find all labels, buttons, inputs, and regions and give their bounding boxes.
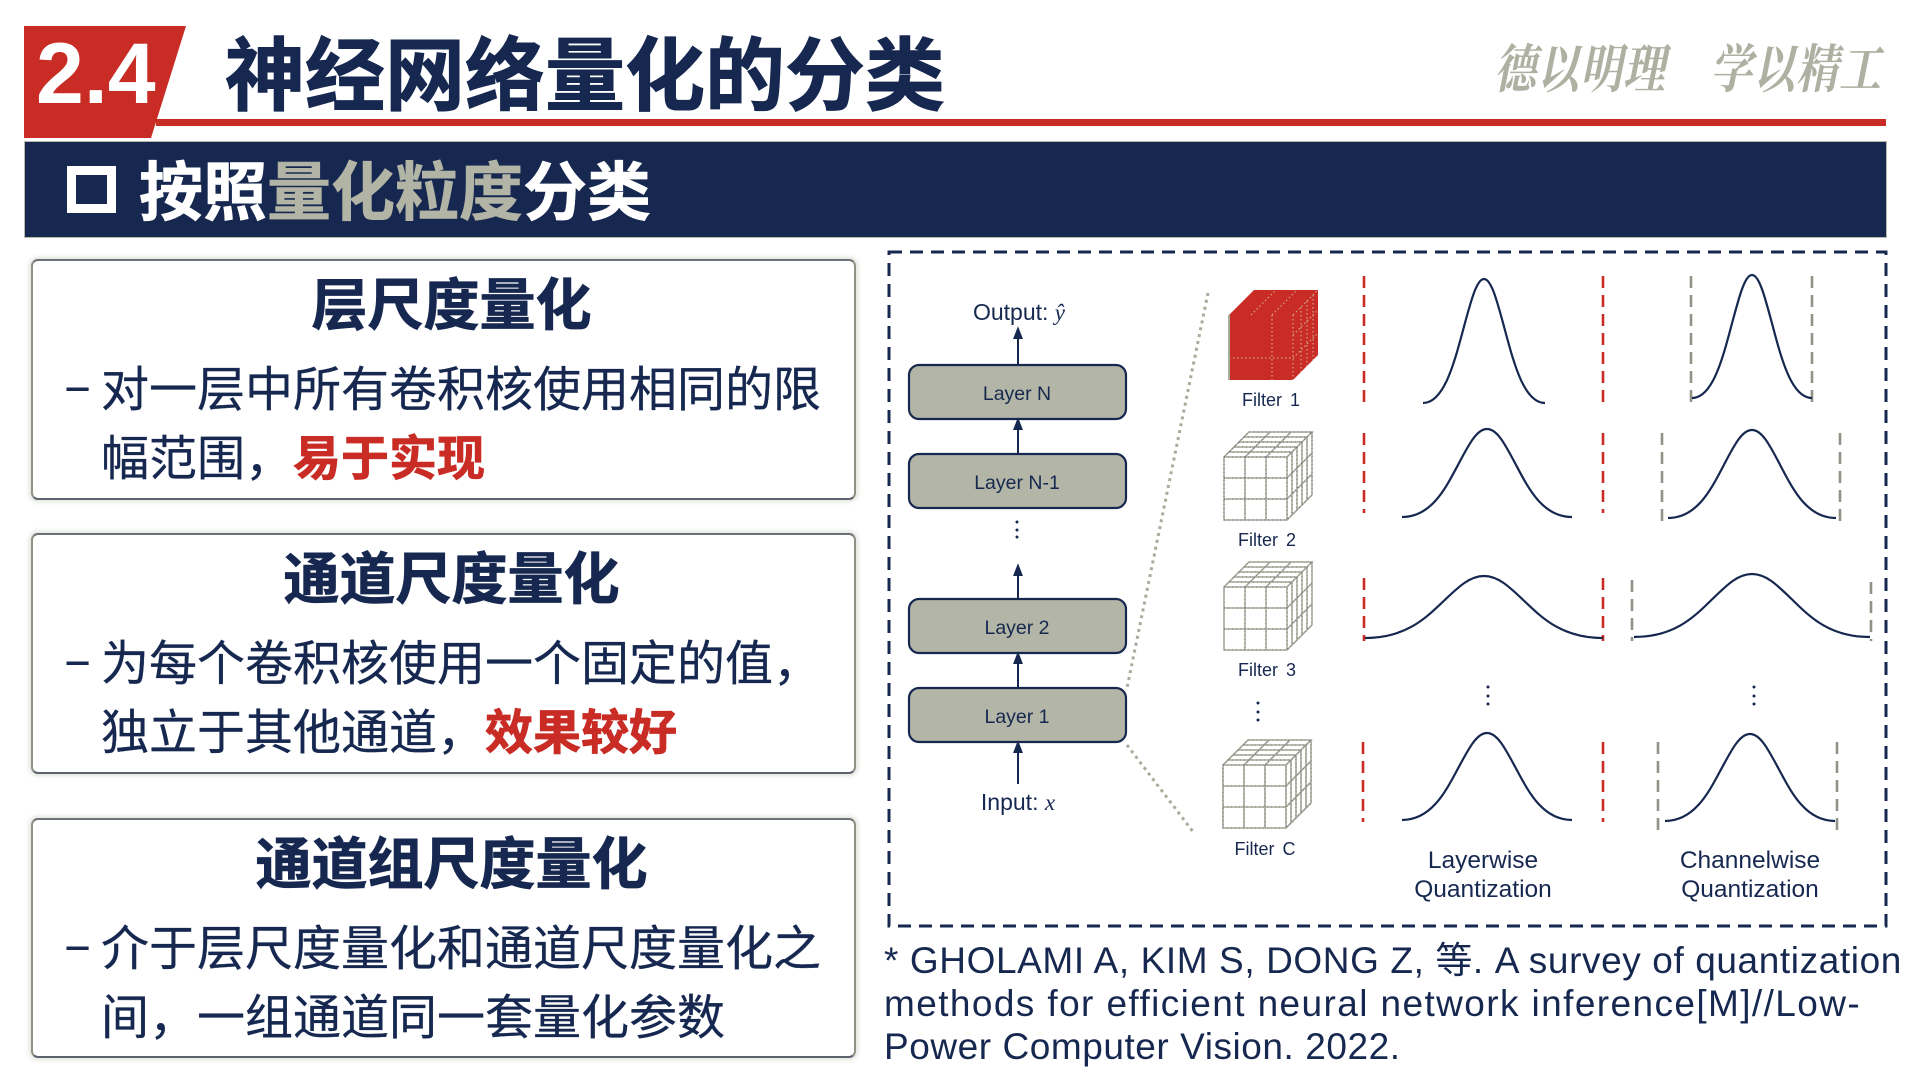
layerwise caption: Layerwise — [1428, 847, 1538, 874]
arrow: to upper layers — [1014, 566, 1022, 598]
bell curve: filter 2 — [1402, 429, 1572, 517]
filter 3 cube — [1224, 562, 1312, 650]
panel dash: – — [67, 640, 88, 682]
bell curve: filter 1 — [1692, 275, 1812, 398]
subheading text: 按照量化粒度分类 — [139, 142, 651, 234]
layerwise distributions — [1363, 276, 1603, 903]
dashed frame — [889, 252, 1886, 926]
arrow: to output — [1014, 329, 1022, 364]
panel text line 1: 对一层中所有卷积核使用相同的限 — [101, 350, 821, 420]
citation line 2: methods for efficient neural network inference[M]//Low- — [884, 983, 1861, 1024]
layer 1 — [909, 688, 1126, 742]
bell curve: filter 3 — [1365, 576, 1603, 638]
layer N: Layer N — [983, 383, 1051, 405]
red range markers — [1363, 276, 1603, 822]
title: 神经网络量化的分类 — [225, 12, 945, 128]
panel text line 1: 介于层尺度量化和通道尺度量化之 — [101, 909, 821, 979]
bell curve: filter C — [1402, 733, 1572, 820]
arrow: input to layer 1 — [1014, 743, 1022, 784]
bell curve: filter 2 — [1668, 430, 1836, 518]
grey range markers — [1632, 276, 1871, 830]
panel: channel scale — [31, 533, 856, 774]
channelwise caption: Channelwise — [1680, 847, 1820, 874]
layer 1: Layer 1 — [984, 706, 1050, 728]
layer N — [909, 365, 1126, 419]
filter 2 label: Filter 2 — [1238, 530, 1296, 550]
layerwise caption: Quantization — [1414, 876, 1552, 903]
input label: Input: x — [981, 789, 1056, 815]
filter 1 label: Filter 1 — [1242, 390, 1300, 410]
checkbox bullet — [67, 166, 116, 213]
panel: channel group scale — [31, 818, 856, 1058]
panel heading: 通道组尺度量化 — [256, 820, 648, 901]
motto calligraphy: right: 学以精工 — [1710, 28, 1882, 104]
filter ellipsis — [1256, 702, 1260, 722]
zoom guide lines — [1127, 293, 1208, 833]
subheading bar — [25, 142, 1886, 237]
ellipsis — [1752, 686, 1756, 706]
title underline — [156, 119, 1886, 126]
filter 1 cube (red) — [1229, 290, 1318, 380]
bell curve: filter C — [1665, 734, 1835, 821]
channelwise caption: Quantization — [1681, 876, 1819, 903]
output label: Output: ŷ — [973, 299, 1066, 325]
panel text line 1: 为每个卷积核使用一个固定的值， — [101, 624, 821, 694]
layer 2: Layer 2 — [984, 617, 1050, 639]
bell curve: filter 1 — [1423, 279, 1545, 403]
panel text line 2: 幅范围，易于实现 — [101, 419, 485, 489]
bell curve: filter 3 — [1634, 574, 1870, 637]
arrow: layer 1 to 2 — [1014, 654, 1022, 687]
panel text line 2: 独立于其他通道，效果较好 — [101, 693, 677, 763]
motto calligraphy: left: 德以明理 — [1494, 28, 1666, 104]
channelwise distributions — [1632, 275, 1871, 903]
panel: layer scale — [31, 259, 856, 500]
filter 2 cube — [1224, 432, 1312, 520]
section number badge — [24, 26, 186, 138]
filter C cube — [1223, 740, 1311, 828]
filter C label: Filter C — [1234, 839, 1296, 859]
ellipsis — [1016, 520, 1018, 538]
ellipsis — [1486, 686, 1490, 706]
section number: 2.4 — [36, 26, 156, 122]
panel dash: – — [67, 366, 88, 408]
layer 2 — [909, 599, 1126, 653]
network stack — [909, 299, 1126, 815]
panel text line 2: 间，一组通道同一套量化参数 — [101, 978, 725, 1048]
filter 3 label: Filter 3 — [1238, 660, 1296, 680]
layer N-1 — [909, 454, 1126, 508]
citation line 1: * GHOLAMI A, KIM S, DONG Z, 等. A survey of quantization — [884, 940, 1902, 981]
panel dash: – — [67, 925, 88, 967]
arrow: layer N-1 to N — [1014, 420, 1022, 453]
layer N-1: Layer N-1 — [974, 472, 1060, 494]
citation line 3: Power Computer Vision. 2022. — [884, 1026, 1401, 1067]
panel heading: 层尺度量化 — [312, 261, 592, 342]
panel heading: 通道尺度量化 — [284, 535, 620, 616]
